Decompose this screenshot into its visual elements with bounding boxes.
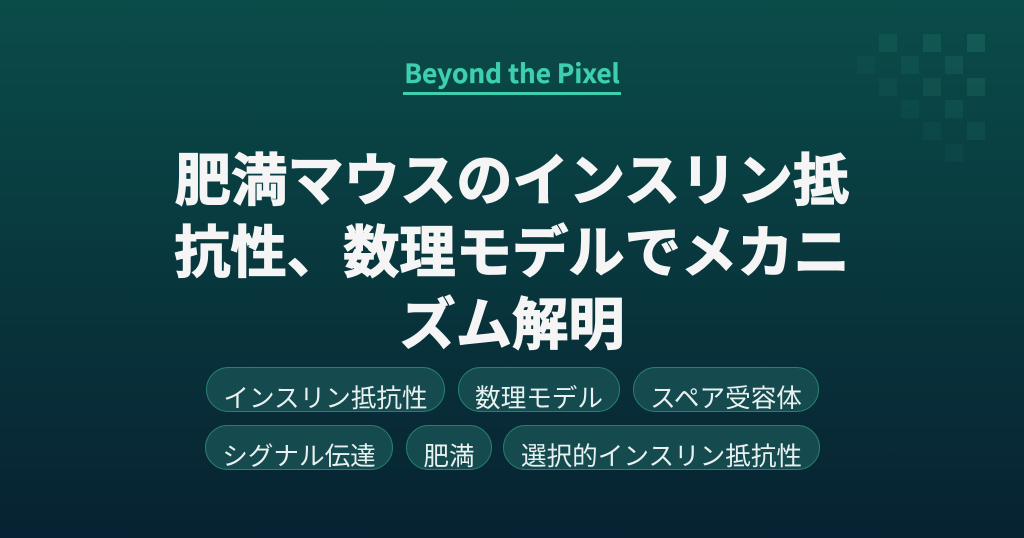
title — [174, 136, 850, 361]
tag: obesity — [406, 424, 492, 470]
tag: mathematical model — [458, 367, 620, 412]
tags — [205, 367, 820, 472]
tag: spare receptors — [633, 367, 819, 412]
tag: mathematical model: 数理モデル — [475, 378, 603, 415]
tag: obesity: 肥満 — [423, 436, 475, 472]
tag: insulin resistance: インスリン抵抗性 — [223, 378, 428, 415]
tag: selective insulin resistance: 選択的インスリン抵抗性 — [521, 436, 802, 472]
title: ズム解明 — [399, 280, 625, 361]
tag: insulin resistance — [206, 367, 445, 412]
decorative square pattern — [879, 34, 985, 140]
tag: selective insulin resistance — [503, 424, 820, 470]
title: 肥満マウスのインスリン抵 — [175, 136, 849, 217]
tag: spare receptors: スペア受容体 — [650, 378, 802, 415]
brand label: Beyond the Pixel — [404, 53, 620, 91]
tag: signal transduction: シグナル伝達 — [222, 436, 376, 472]
tag: signal transduction — [205, 424, 393, 470]
title: 抗性、数理モデルでメカニ — [174, 208, 850, 289]
